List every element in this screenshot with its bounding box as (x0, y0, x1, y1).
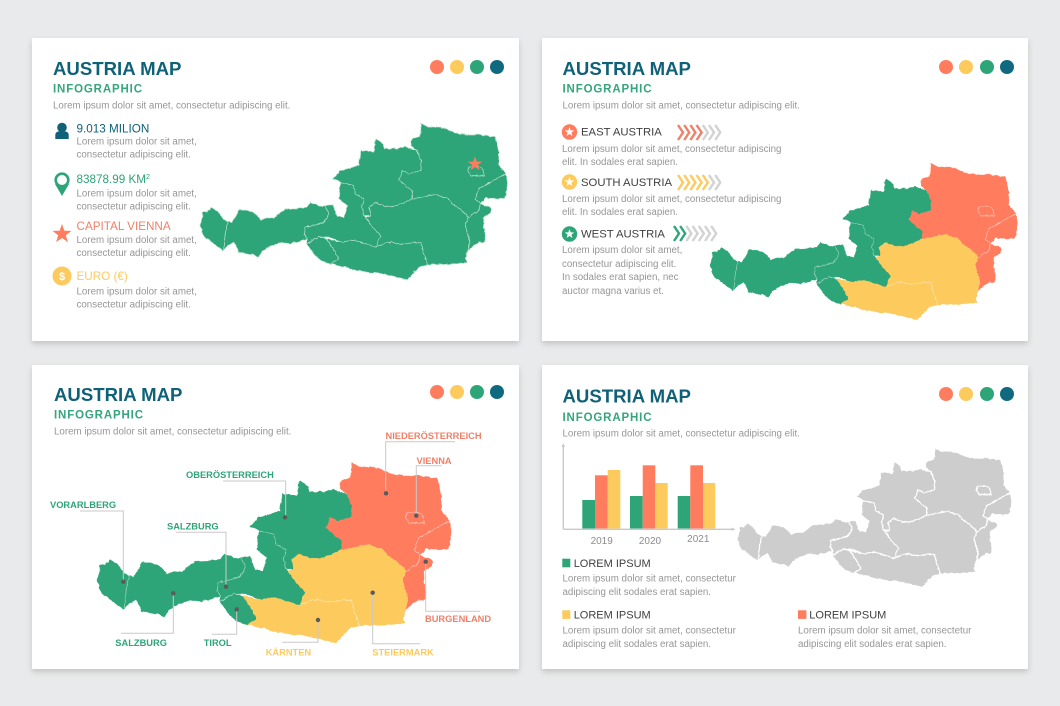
legend: green: Lorem ipsum dolor sit amet, consectetur (562, 574, 737, 584)
legend: yellow: adipiscing elit sodales erat sapien. (562, 639, 711, 650)
bar chart (562, 443, 736, 547)
icon: south badge (562, 174, 577, 190)
icon: currency coin: $ (59, 271, 65, 283)
legend: yellow: Lorem ipsum dolor sit amet, consectetur (562, 626, 737, 636)
fact: area: 83878.99 KM (76, 173, 146, 186)
fact: capital: Lorem ipsum dolor sit amet, (76, 235, 197, 246)
icon: east badge (562, 124, 577, 140)
fact: currency: Lorem ipsum dolor sit amet, (76, 286, 197, 298)
callout: Vorarlberg: VORARLBERG (50, 500, 116, 510)
text: west: In sodales erat sapien, nec (562, 272, 679, 283)
icon: currency coin (52, 266, 72, 286)
fact: area: 2 (146, 174, 150, 181)
intro text: Lorem ipsum dolor sit amet, consectetur adipiscing elit. (562, 100, 800, 112)
fact: population: consectetur adipiscing elit. (76, 150, 191, 160)
subtitle: INFOGRAPHIC (54, 410, 144, 422)
text: west: consectetur adipiscing elit. (562, 259, 676, 270)
fact: currency: EURO (€) (76, 270, 128, 283)
colour dots (430, 60, 504, 74)
callout: Tirol: TIROL (204, 638, 232, 648)
icon: Vienna star (468, 156, 482, 170)
legend: green: LOREM IPSUM (574, 558, 651, 570)
subtitle: INFOGRAPHIC (562, 84, 652, 96)
fact: currency: consectetur adipiscing elit. (76, 300, 191, 310)
callout: Burgenland (424, 560, 491, 624)
fact: capital: CAPITAL VIENNA (76, 220, 171, 233)
callout: Salzburg lower (115, 591, 176, 648)
legend: orange: adipiscing elit sodales erat sapien. (798, 639, 947, 650)
title: AUSTRIA MAP (54, 384, 182, 405)
map: Austria grey (737, 447, 1012, 587)
fact: area: Lorem ipsum dolor sit amet, (76, 188, 197, 200)
panel: regions east south west (542, 38, 1028, 341)
text: east: elit. In sodales erat sapien. (562, 157, 678, 168)
callout: Oberösterreich (186, 470, 287, 520)
bar chart: 2020 (639, 536, 662, 547)
fact: population (76, 122, 197, 160)
icon: location pin (55, 174, 69, 196)
legend: orange (798, 610, 972, 650)
fact: area: consectetur adipiscing elit. (76, 202, 191, 212)
callout: Kärnten (266, 618, 320, 658)
map: Austria by east south west (710, 163, 1017, 319)
title: AUSTRIA MAP (53, 58, 181, 79)
panel: provinces (32, 365, 519, 669)
panel: statistics (542, 365, 1028, 669)
fact: population: 9.013 MILION (76, 122, 149, 136)
text: west: Lorem ipsum dolor sit amet, (562, 245, 682, 256)
callout: Niederösterreich: NIEDERÖSTERREICH (386, 431, 482, 441)
callout: Vorarlberg (50, 500, 126, 584)
legend: yellow (562, 610, 737, 650)
callout: Salzburg upper (167, 522, 228, 589)
fact: population: Lorem ipsum dolor sit amet, (76, 136, 197, 148)
intro text: Lorem ipsum dolor sit amet, consectetur adipiscing elit. (54, 426, 291, 438)
bar chart: 2019 (591, 536, 613, 547)
text: west: auctor magna varius et. (562, 286, 664, 297)
chevrons: east (678, 125, 720, 140)
text: east (562, 144, 781, 168)
callout: Niederösterreich (384, 431, 482, 495)
icon: west badge (562, 226, 577, 242)
legend: orange: Lorem ipsum dolor sit amet, consectetur (798, 626, 972, 636)
fact: currency (76, 270, 197, 310)
colour dots (430, 385, 504, 399)
fact: area (76, 173, 197, 212)
text: west (562, 245, 682, 297)
heading: east austria: EAST AUSTRIA (581, 126, 662, 138)
callout: Vienna: VIENNA (416, 456, 452, 466)
map: Austria provinces (97, 462, 451, 642)
bar chart: 2021 (687, 534, 710, 545)
callout: Salzburg upper: SALZBURG (167, 522, 219, 532)
text: south: elit. In sodales erat sapien. (562, 207, 678, 218)
callout: Oberösterreich: OBERÖSTERREICH (186, 470, 274, 480)
callout: Salzburg lower: SALZBURG (115, 638, 167, 648)
fact: capital: consectetur adipiscing elit. (76, 248, 191, 259)
panel: key facts (32, 38, 519, 341)
colour dots (939, 60, 1014, 74)
icon: star (52, 224, 72, 242)
chevrons: south (678, 175, 720, 190)
colour dots (939, 387, 1014, 401)
text: south: Lorem ipsum dolor sit amet, consectetur adipiscing (562, 194, 781, 205)
callout: Vienna (414, 456, 452, 518)
subtitle: INFOGRAPHIC (562, 412, 652, 424)
text: south (562, 194, 781, 218)
callout: Tirol (204, 607, 239, 648)
legend: green (562, 558, 737, 598)
intro text: Lorem ipsum dolor sit amet, consectetur adipiscing elit. (562, 428, 800, 440)
heading: south austria: SOUTH AUSTRIA (581, 177, 672, 189)
title: AUSTRIA MAP (562, 58, 691, 79)
callout: Kärnten: KÄRNTEN (266, 648, 311, 658)
chevrons: west (674, 226, 716, 241)
heading: west austria: WEST AUSTRIA (581, 228, 665, 240)
legend: yellow: LOREM IPSUM (574, 610, 651, 622)
callout: Steiermark: STEIERMARK (372, 648, 434, 658)
title: AUSTRIA MAP (562, 386, 691, 406)
legend: orange: LOREM IPSUM (809, 610, 886, 622)
callout: Burgenland: BURGENLAND (425, 614, 491, 624)
legend: green: adipiscing elit sodales erat sapien. (562, 587, 711, 598)
map: Austria all green (200, 123, 507, 279)
fact: capital (76, 220, 197, 259)
icon: person (55, 123, 69, 139)
subtitle: INFOGRAPHIC (53, 84, 143, 96)
text: east: Lorem ipsum dolor sit amet, consectetur adipiscing (562, 144, 781, 155)
callout: Steiermark (370, 590, 434, 658)
intro text: Lorem ipsum dolor sit amet, consectetur adipiscing elit. (53, 100, 290, 112)
